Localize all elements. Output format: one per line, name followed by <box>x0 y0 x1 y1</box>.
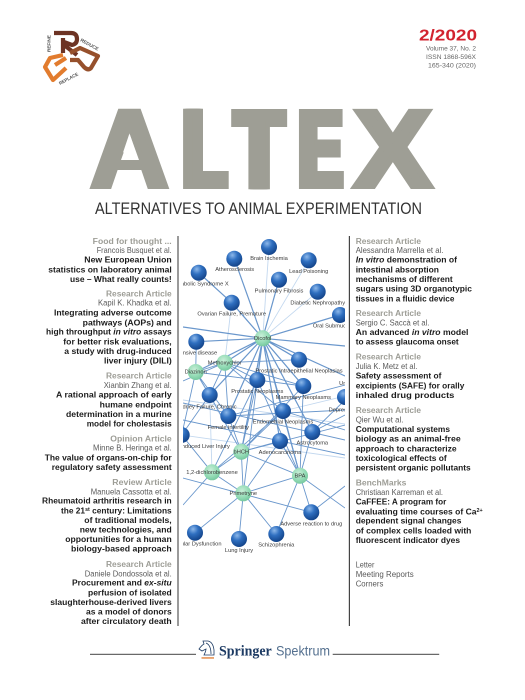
icon: 3R logo refine reduce replace: REDUCE <box>80 38 99 52</box>
node labels: Adenocarcinoma <box>259 450 302 456</box>
text block: Zhang article: Research Article <box>106 371 172 381</box>
text block: Marrella article: intestinal absorption <box>356 264 439 274</box>
text block: other sections: Corners <box>356 579 383 589</box>
text block: Dondossola article: perfusion of isolated <box>88 587 172 597</box>
text block: Cassotta article: century: Limitations <box>90 505 172 515</box>
text block: Saccà article <box>356 308 468 347</box>
text block: Heringa article: regulatory safety assessment <box>52 462 172 472</box>
text block: Cassotta article: the 21 <box>61 505 86 515</box>
node labels: Oral Submucous <box>313 324 355 330</box>
text block: Metz article: Julia K. Metz et al. <box>356 361 417 371</box>
issue number and volume block: 2/2020 <box>419 28 477 44</box>
node labels: Vascular Dysfunction <box>168 541 222 547</box>
text block: food for thought: Food for thought ... <box>93 236 172 246</box>
text block: Zhang article: model for cholestasis <box>87 419 172 429</box>
icon: 3R logo refine reduce replace <box>45 33 99 86</box>
text block: Khadka article: Integrating adverse outcome <box>54 308 172 318</box>
text block: Heringa article: Opinion Article <box>110 433 172 443</box>
title: ALTEX: T <box>236 88 283 209</box>
issue number and volume block: Volume 37, No. 2 <box>426 45 477 52</box>
publisher name: Spektrum <box>276 642 330 658</box>
text block: Cassotta article: biology-based approach <box>71 544 172 554</box>
title: ALTEX: X <box>355 90 431 209</box>
text block: BenchMarks article: 2+ <box>476 508 483 514</box>
node labels: BPA <box>295 473 306 479</box>
text block: food for thought: statistics on laboratory animal <box>48 264 172 274</box>
text block: other sections: Letter <box>356 559 375 569</box>
text block: Heringa article <box>45 433 172 472</box>
text block: BenchMarks article: Christiaan Karreman et al. <box>356 487 443 497</box>
footer rule left <box>90 654 196 655</box>
text block: Cassotta article: opportunities for a human <box>65 534 172 544</box>
network diagram <box>183 239 345 553</box>
text block: BenchMarks article <box>356 478 483 545</box>
text block: Marrella article: In vitro demonstration of <box>356 255 457 265</box>
text block: Metz article: Research Article <box>356 352 421 362</box>
node labels: Prostatic Intraepithelial Neoplasias <box>255 369 343 375</box>
node labels: Diabetic Nephropathy <box>290 300 345 306</box>
title: ALTEX: E <box>300 88 342 209</box>
text block: Marrella article: sugars using 3D organotypic <box>356 284 472 294</box>
text block: Dondossola article: Procurement and ex-situ <box>72 578 172 588</box>
node labels: Atherosclerosis <box>215 267 254 273</box>
node labels: 1,2-dichlorobenzene <box>186 470 238 476</box>
text block: Cassotta article: Rheumatoid arthritis research in <box>42 496 172 506</box>
text block: Saccà article: Research Article <box>356 308 421 318</box>
text block: Marrella article: Research Article <box>356 236 421 246</box>
publisher name <box>219 642 330 660</box>
node labels: Ovarian Failure, Premature <box>197 312 266 318</box>
text block: Dondossola article: slaughterhouse-derived livers <box>50 597 172 607</box>
text block: Marrella article: mechanisms of different <box>356 274 453 284</box>
text block: Saccà article: to assess glaucoma onset <box>356 337 459 347</box>
text block: Khadka article: for better risk evaluations, <box>63 336 172 346</box>
text block: Cassotta article: st <box>85 507 90 513</box>
title: ALTEX: A <box>91 89 168 209</box>
text block: Marrella article: Alessandra Marrella et al. <box>356 245 443 255</box>
text block: Marrella article <box>356 236 472 303</box>
node labels: Unknown <box>339 381 363 387</box>
text block: food for thought: Francois Busquet et al. <box>97 245 172 255</box>
issue number and volume block <box>419 28 477 69</box>
text block: BenchMarks article: evaluating time courses of Ca <box>356 506 477 516</box>
text block: Khadka article: Research Article <box>106 289 172 299</box>
node labels: Lung Injury <box>225 548 253 554</box>
text block: Wu article: persistent organic pollutants <box>356 463 471 473</box>
node labels: Mammary Neoplasms <box>276 395 331 401</box>
icon: 3R logo refine reduce replace: REPLACE <box>58 72 79 86</box>
text block: Dondossola article: Daniele Dondossola et al. <box>85 568 172 578</box>
publisher name: Springer <box>219 644 272 660</box>
text block: BenchMarks article: BenchMarks <box>356 478 407 488</box>
issue number and volume block: 165-340 (2020) <box>428 62 476 69</box>
text block: Heringa article: Minne B. Heringa et al. <box>93 443 172 453</box>
text block: Cassotta article: new technologies, and <box>80 524 172 534</box>
node labels: Dicofol <box>254 336 271 342</box>
text block: Metz article <box>356 352 465 400</box>
footer rule right <box>333 654 439 655</box>
text block: food for thought: use – What really counts! <box>70 274 172 284</box>
node labels: Primetryne <box>230 491 257 497</box>
text block: Dondossola article: Research Article <box>106 559 172 569</box>
text block: Wu article <box>356 405 471 473</box>
node labels: Induced Liver Injury <box>180 444 230 450</box>
text block: Dondossola article <box>50 559 172 626</box>
node labels: Brain Ischemia <box>250 256 289 262</box>
title: ALTEX <box>91 88 431 210</box>
text block: Zhang article: Xianbin Zhang et al. <box>104 380 172 390</box>
text block: Wu article: Research Article <box>356 405 421 415</box>
right column rule <box>349 236 350 626</box>
text block: Khadka article: liver injury (DILI) <box>104 356 172 366</box>
green nodes <box>188 330 308 501</box>
text block: Khadka article: pathways (AOPs) and <box>83 317 172 327</box>
node labels: Lead Poisoning <box>289 269 328 275</box>
text block: Wu article: biology as an animal-free <box>356 434 461 444</box>
left column rule <box>177 236 179 626</box>
node labels: Hypertensive disease <box>163 351 217 357</box>
text block: Cassotta article: Review Article <box>112 477 172 487</box>
text block: Metz article: excipients (SAFE) for orally <box>356 380 465 390</box>
issue number and volume block: ISSN 1868-596X <box>426 54 477 61</box>
network edges <box>182 247 345 539</box>
text block: Khadka article: Kapil K. Khadka et al. <box>98 298 172 308</box>
text block: Khadka article: a study with drug-induced <box>64 346 172 356</box>
text block: other sections: Meeting Reports <box>356 569 414 579</box>
text block: Cassotta article <box>42 477 172 554</box>
text block: Zhang article: humane endpoint <box>100 399 172 409</box>
text block: Zhang article: A rational approach of early <box>56 390 172 400</box>
text block: BenchMarks article: dependent signal changes <box>356 516 462 526</box>
node labels: Diazinon <box>185 370 207 376</box>
node labels <box>183 256 345 553</box>
text block: Metz article: Safety assessment of <box>356 371 442 381</box>
subtitle: ALTERNATIVES TO ANIMAL EXPERIMENTATION <box>95 200 422 218</box>
node labels: Endometrial Neoplasms <box>253 420 313 426</box>
text block: Khadka article <box>46 289 172 366</box>
text block: food for thought: New European Union <box>84 255 172 265</box>
text block: BenchMarks article: of complex cells loaded with <box>356 525 471 535</box>
blue nodes <box>174 239 353 547</box>
text block: Zhang article <box>56 371 172 429</box>
text block: Wu article: toxicological effects of <box>356 453 447 463</box>
text block: Heringa article: The value of organs-on-chip for <box>45 452 172 462</box>
text block: Dondossola article: after circulatory death <box>81 616 172 626</box>
text block: Cassotta article: of traditional models, <box>84 515 172 525</box>
text block: other sections <box>356 559 414 589</box>
node labels: Metabolic Syndrome X <box>171 281 229 287</box>
text block: BenchMarks article: fluorescent indicator dyes <box>356 535 460 545</box>
text block: Saccà article: An advanced in vitro model <box>356 327 468 337</box>
text block: Saccà article: Sergio C. Saccà et al. <box>356 317 429 327</box>
node labels: Depression <box>329 408 357 414</box>
node labels: Female infertility <box>208 425 249 431</box>
text block: Wu article: approach to characterize <box>356 443 457 453</box>
text block: Cassotta article: Manuela Cassotta et al. <box>91 486 172 496</box>
text block: Wu article: Computational systems <box>356 424 450 434</box>
node labels: Schizophrenia <box>258 543 295 549</box>
text block: Wu article: Qier Wu et al. <box>356 414 403 424</box>
text block: BenchMarks article: CaFFEE: A program for <box>356 497 447 507</box>
node labels: bHCH <box>234 449 249 455</box>
icon: 3R logo refine reduce replace: REFINE <box>46 35 52 52</box>
text block: Khadka article: high throughput in vitro assays <box>46 327 172 337</box>
title: ALTEX: L <box>183 90 226 210</box>
node labels: Adverse reaction to drug <box>280 521 342 527</box>
node labels: Pulmonary Fibrosis <box>255 288 303 294</box>
node labels: Prostatic Neoplasms <box>231 389 284 395</box>
node labels: Kidney Failure, Chronic <box>177 404 237 410</box>
node labels: Astrocytoma <box>296 440 329 446</box>
node labels: Methoxychlor <box>208 360 242 366</box>
text block: Marrella article: tissues in a fluidic device <box>356 293 455 303</box>
icon: Springer horse <box>199 641 214 659</box>
text block: Dondossola article: as a model of donors <box>86 606 172 616</box>
text block: Metz article: inhaled drug products <box>356 390 455 400</box>
text block: food for thought <box>48 236 172 284</box>
text block: Zhang article: determination in a murine <box>66 409 172 419</box>
